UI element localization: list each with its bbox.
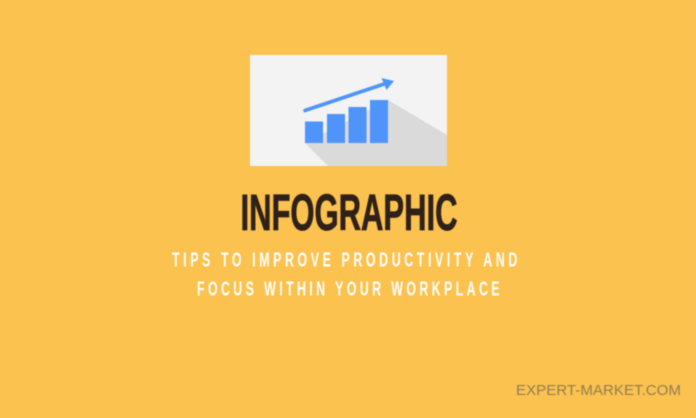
footer source label: EXPERT-MARKET.COM bbox=[516, 383, 681, 399]
subtitle line 2: FOCUS WITHIN YOUR WORKPLACE bbox=[197, 277, 500, 300]
bar chart bbox=[305, 100, 388, 143]
icon: long shadow bbox=[305, 100, 447, 166]
subtitle line 1: TIPS TO IMPROVE PRODUCTIVITY AND bbox=[172, 248, 517, 271]
title: INFOGRAPHIC bbox=[240, 184, 458, 241]
panel: chart card bbox=[250, 55, 447, 166]
arrow bbox=[305, 78, 394, 110]
subtitle bbox=[172, 248, 517, 300]
